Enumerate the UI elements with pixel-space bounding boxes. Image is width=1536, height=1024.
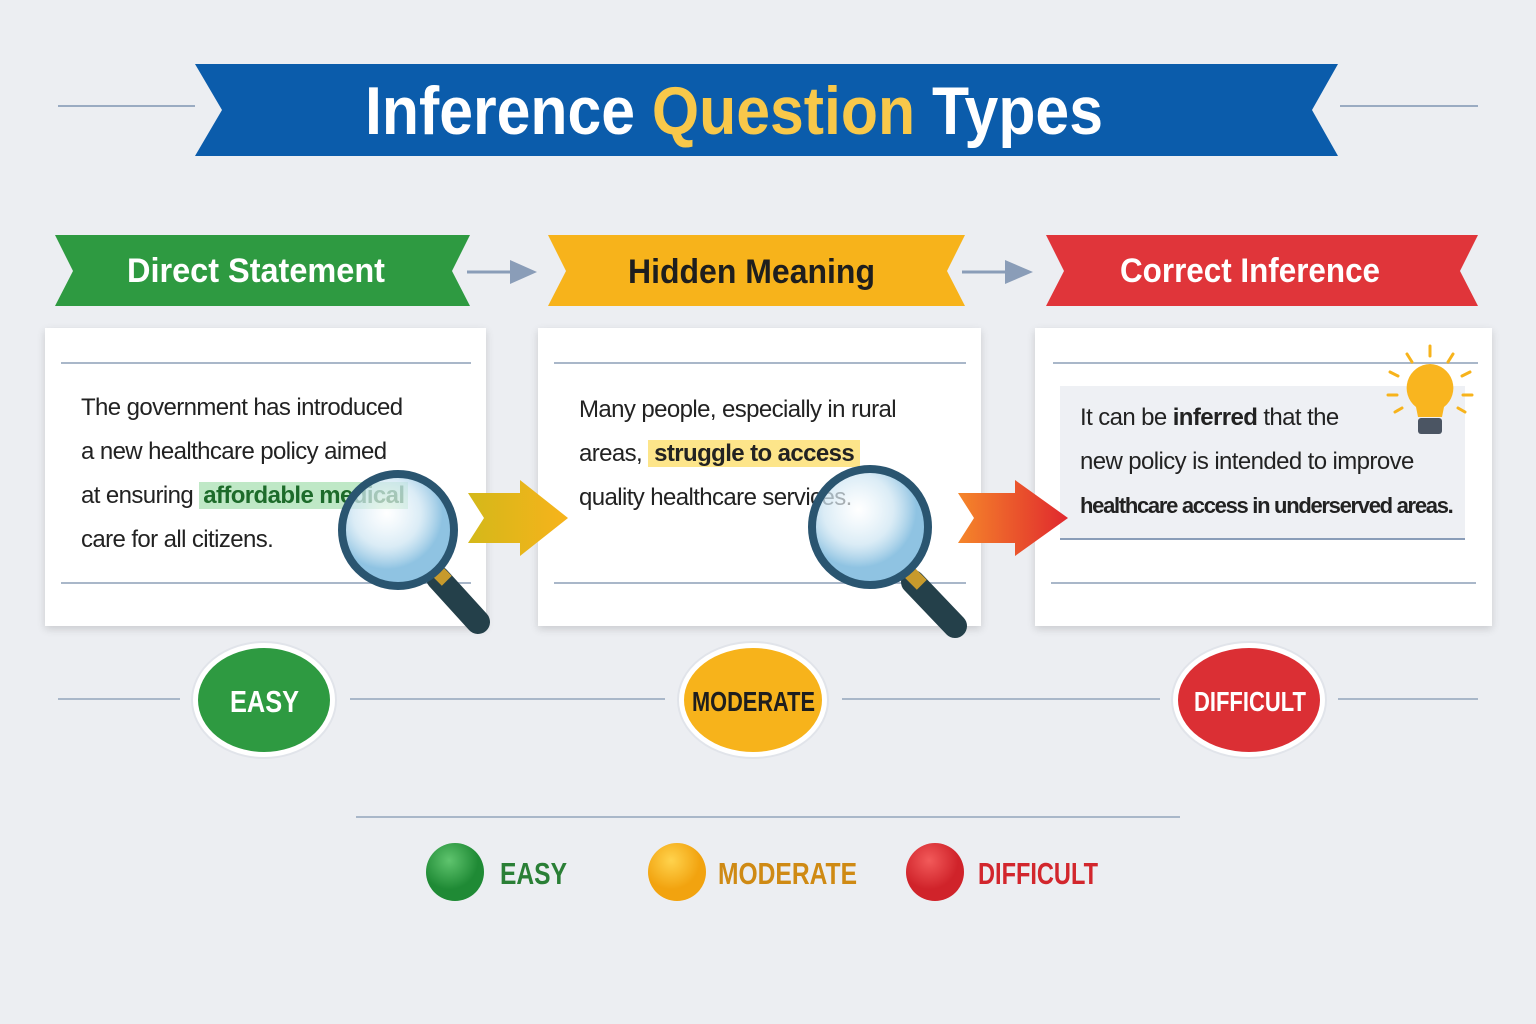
text: direct statement <box>81 394 408 553</box>
card: direct statement <box>45 328 486 626</box>
text: inference: It can be inferred that the <box>1080 404 1339 431</box>
card: correct inference <box>1035 328 1492 626</box>
title banner: Inference Question Types <box>365 73 1103 149</box>
ribbon: correct inference <box>1046 235 1478 306</box>
text: inference: healthcare access in underserved areas. <box>1080 493 1452 518</box>
badge: easy <box>192 642 336 758</box>
title banner <box>58 64 1478 156</box>
text: hidden meaning: areas, struggle to access <box>579 440 854 467</box>
text: direct statement: at ensuring affordable medical <box>81 482 404 509</box>
icon: magnifier 2 <box>812 469 955 626</box>
arrow: big red <box>958 480 1068 556</box>
ribbon: hidden meaning: Hidden Meaning <box>628 253 875 291</box>
text: hidden meaning: Many people, especially in rural <box>579 396 896 423</box>
legend: DIFFICULT <box>978 856 1098 891</box>
ribbon: hidden meaning <box>548 235 965 306</box>
legend: MODERATE <box>718 856 857 891</box>
icon: lightbulb <box>1388 346 1472 434</box>
arrow: big yellow <box>468 480 568 556</box>
text: inference: new policy is intended to improve <box>1080 448 1414 475</box>
text: hidden meaning <box>579 396 896 511</box>
text: direct statement: care for all citizens. <box>81 526 273 553</box>
text: hidden meaning: quality healthcare services. <box>579 484 852 511</box>
badge: difficult: DIFFICULT <box>1194 686 1306 717</box>
text: inference <box>1060 386 1465 540</box>
legend <box>426 843 1098 901</box>
ribbon: correct inference: Correct Inference <box>1120 252 1380 290</box>
text: direct statement: a new healthcare policy aimed <box>81 438 386 465</box>
text: direct statement: The government has introduced <box>81 394 402 421</box>
ribbon: direct statement <box>55 235 470 306</box>
arrow 2 <box>962 260 1033 284</box>
badge: easy: EASY <box>230 684 299 719</box>
arrow 1 <box>467 260 537 284</box>
legend: EASY <box>500 856 567 891</box>
ribbon: direct statement: Direct Statement <box>127 252 385 290</box>
timeline line <box>58 698 1478 700</box>
badge: moderate: MODERATE <box>692 686 815 717</box>
card: hidden meaning <box>538 328 981 626</box>
icon: magnifier 1 <box>342 474 478 622</box>
badge: moderate <box>678 642 828 758</box>
badge: difficult <box>1172 642 1326 758</box>
